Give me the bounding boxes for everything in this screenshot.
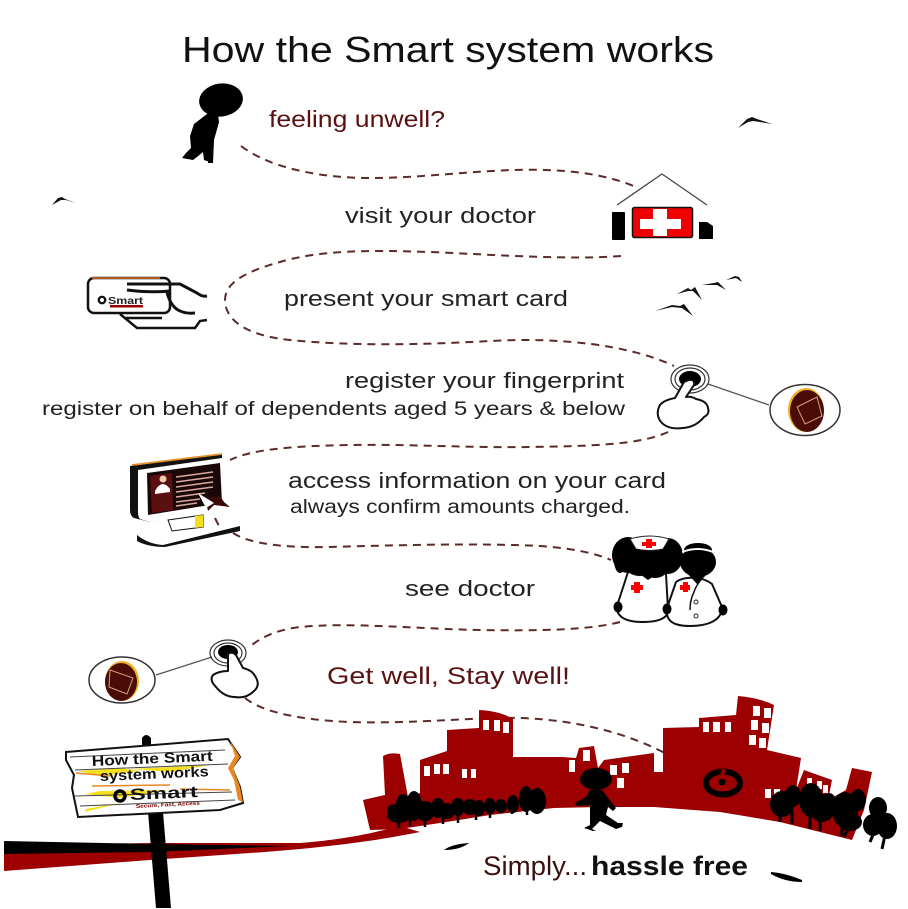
icon: fingerprint in ellipse <box>770 384 840 436</box>
icon: finger pressing scanner <box>658 365 709 428</box>
icon: hand holding smart card <box>88 278 207 328</box>
icon: computer screen <box>130 454 240 547</box>
step text: register your fingerprint: register your fingerprint <box>345 368 624 393</box>
dashed journey path <box>215 146 687 766</box>
step text: feeling unwell: feeling unwell? <box>269 106 445 132</box>
icon: finger pressing scanner (second) <box>210 640 258 697</box>
trees left group <box>387 786 546 828</box>
city skyline <box>363 696 872 840</box>
step text: get well: Get well, Stay well! <box>327 663 570 690</box>
icon: nurse and doctor <box>612 536 728 626</box>
tagline: Simply... <box>483 851 587 881</box>
icon: bird top right <box>738 117 772 128</box>
signpost: system works <box>99 764 209 785</box>
logo on city building <box>706 769 740 794</box>
step note: confirm amounts: always confirm amounts charged. <box>290 497 630 518</box>
trees right group <box>770 783 897 849</box>
walking person <box>575 768 623 831</box>
icon: clinic building <box>612 174 713 240</box>
step text: access information: access information on your card <box>288 468 666 493</box>
step text: see doctor: see doctor <box>405 576 535 601</box>
ground band <box>4 826 420 871</box>
signpost: Secure, Fast, Access <box>136 801 200 810</box>
step text: visit your doctor: visit your doctor <box>345 203 536 228</box>
ground ellipse marks <box>444 843 802 882</box>
connector line to second scanner <box>156 657 212 675</box>
title: How the Smart system works <box>182 29 714 70</box>
connector line to fingerprint <box>708 384 769 405</box>
icon: hand holding smart card: Smart <box>108 296 144 307</box>
tagline: hassle free <box>591 851 748 881</box>
icon: fingerprint in ellipse (second) <box>89 657 155 703</box>
icon: unwell person <box>182 81 245 163</box>
icon: flock of birds <box>655 276 742 316</box>
signpost: How the Smart <box>91 749 213 770</box>
signpost: Smart <box>129 784 199 804</box>
icon: bird top left <box>52 197 76 205</box>
step note: dependents: register on behalf of dependents aged 5 years & below <box>42 399 625 420</box>
signpost <box>66 735 243 908</box>
step text: present your smart card: present your smart card <box>284 286 568 311</box>
